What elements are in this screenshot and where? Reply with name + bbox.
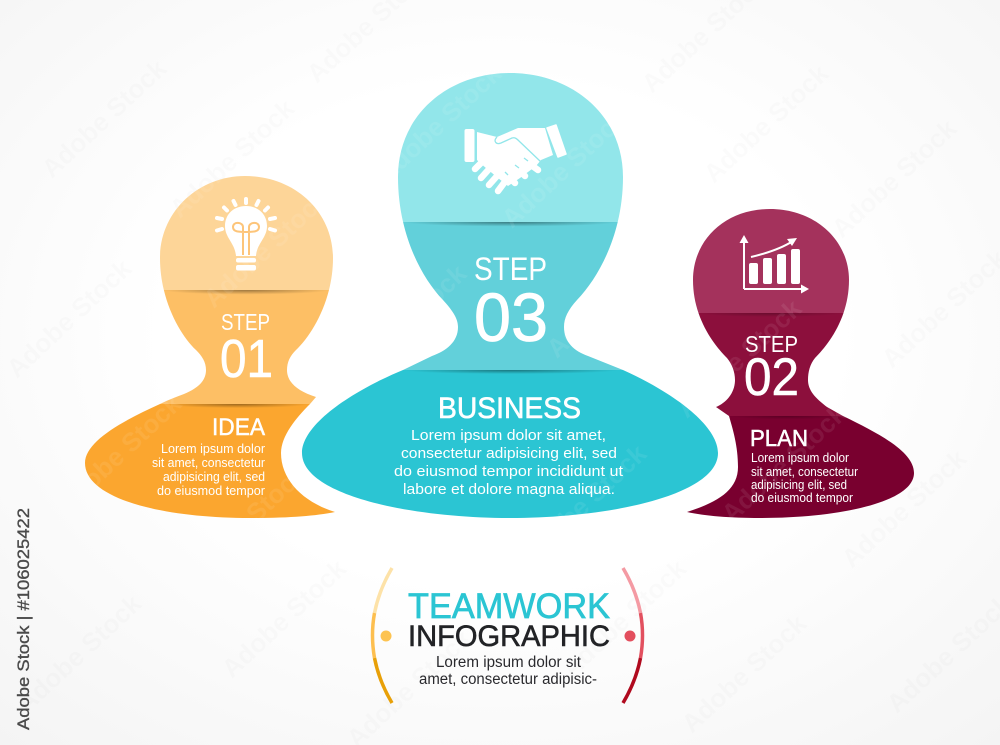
step number 02: 02 [744, 348, 799, 407]
left bracket arc [372, 568, 392, 703]
neck segment: cyan [403, 222, 623, 370]
text block: plan description: do eiusmod tempor [751, 491, 853, 505]
head segment: orange [160, 176, 333, 290]
foreground watermark: Adobe Stock [51, 388, 188, 519]
text block: idea description: adipisicing elit, sed [163, 470, 265, 484]
step number 03: 03 [474, 279, 548, 356]
neck segment: maroon [698, 313, 844, 416]
text block: plan description: Lorem ipsum dolor [751, 451, 849, 465]
person: step 01 idea [85, 176, 335, 518]
background watermark: Adobe Stock [164, 93, 301, 224]
foreground watermark: Adobe Stock [541, 233, 678, 364]
background watermark: Adobe Stock [1, 253, 138, 384]
subtitle text: amet, consectetur adipisic- [419, 671, 597, 688]
icon: growth chart [740, 235, 809, 294]
right bracket arc [623, 568, 642, 703]
step label 02: STEP [745, 331, 798, 357]
text block: plan description: adipisicing elit, sed [751, 478, 847, 492]
right dot [624, 630, 636, 642]
text block: idea description: sit amet, consectetur [152, 456, 265, 470]
foreground watermark: Adobe Stock [496, 103, 633, 234]
neck segment: orange [160, 290, 329, 404]
foreground watermark: Adobe Stock [198, 183, 335, 314]
person: step 03 business [302, 73, 718, 518]
text block: business description: consectetur adipisicing elit, sed [401, 446, 617, 462]
body segment: cyan [302, 370, 718, 518]
foreground watermark: Adobe Stock [336, 258, 473, 389]
background watermark: Adobe Stock [826, 113, 963, 244]
background watermark: Adobe Stock [216, 553, 353, 684]
left dot [380, 630, 392, 642]
text block: idea description: Lorem ipsum dolor [161, 442, 265, 456]
heading: business: BUSINESS [438, 392, 581, 425]
text block: idea description: do eiusmod tempor [157, 484, 265, 498]
heading: plan: PLAN [750, 425, 808, 451]
icon: light bulb [217, 199, 275, 270]
text block: idea description [152, 442, 265, 498]
text block: business description: labore et dolore magna aliqua. [403, 482, 615, 498]
person: step 02 plan [687, 209, 914, 518]
background watermark: Adobe Stock [11, 588, 148, 719]
foreground watermark: Adobe Stock [164, 93, 301, 224]
head segment: cyan [398, 73, 623, 222]
text block: business description: Lorem ipsum dolor sit amet, [411, 428, 606, 444]
subtitle text: Lorem ipsum dolor sit [436, 654, 582, 671]
title: teamwork: TEAMWORK [408, 587, 610, 626]
side credit text: Adobe Stock | #106025422 [14, 508, 33, 730]
body segment: maroon [687, 416, 914, 518]
step label 03: STEP [474, 251, 547, 287]
text block: plan description [751, 451, 858, 505]
title block: teamwork infographic [372, 568, 642, 703]
text block: plan description: sit amet, consectetur [751, 465, 858, 479]
foreground watermark: Adobe Stock [671, 293, 808, 424]
text block: business description: do eiusmod tempor incididunt ut [394, 464, 623, 480]
heading: idea: IDEA [212, 414, 265, 441]
foreground watermark: Adobe Stock [516, 438, 653, 569]
foreground watermark: Adobe Stock [371, 58, 508, 189]
title: infographic: INFOGRAPHIC [408, 620, 610, 653]
background watermark: Adobe Stock [836, 443, 973, 574]
foreground watermark: Adobe Stock [716, 398, 853, 529]
background watermark: Adobe Stock [698, 58, 835, 189]
subtitle text [419, 654, 597, 688]
body segment: orange [85, 404, 335, 518]
head segment: maroon [693, 209, 849, 313]
text block: business description [394, 428, 623, 498]
foreground watermark: Adobe Stock [176, 458, 313, 589]
background watermark: Adobe Stock [676, 608, 813, 739]
step label 01: STEP [221, 309, 270, 335]
step number 01: 01 [220, 329, 273, 389]
icon: handshake [464, 125, 566, 191]
background watermark: Adobe Stock [36, 53, 173, 184]
foreground watermark [51, 58, 853, 589]
background watermark: Adobe Stock [556, 553, 693, 684]
